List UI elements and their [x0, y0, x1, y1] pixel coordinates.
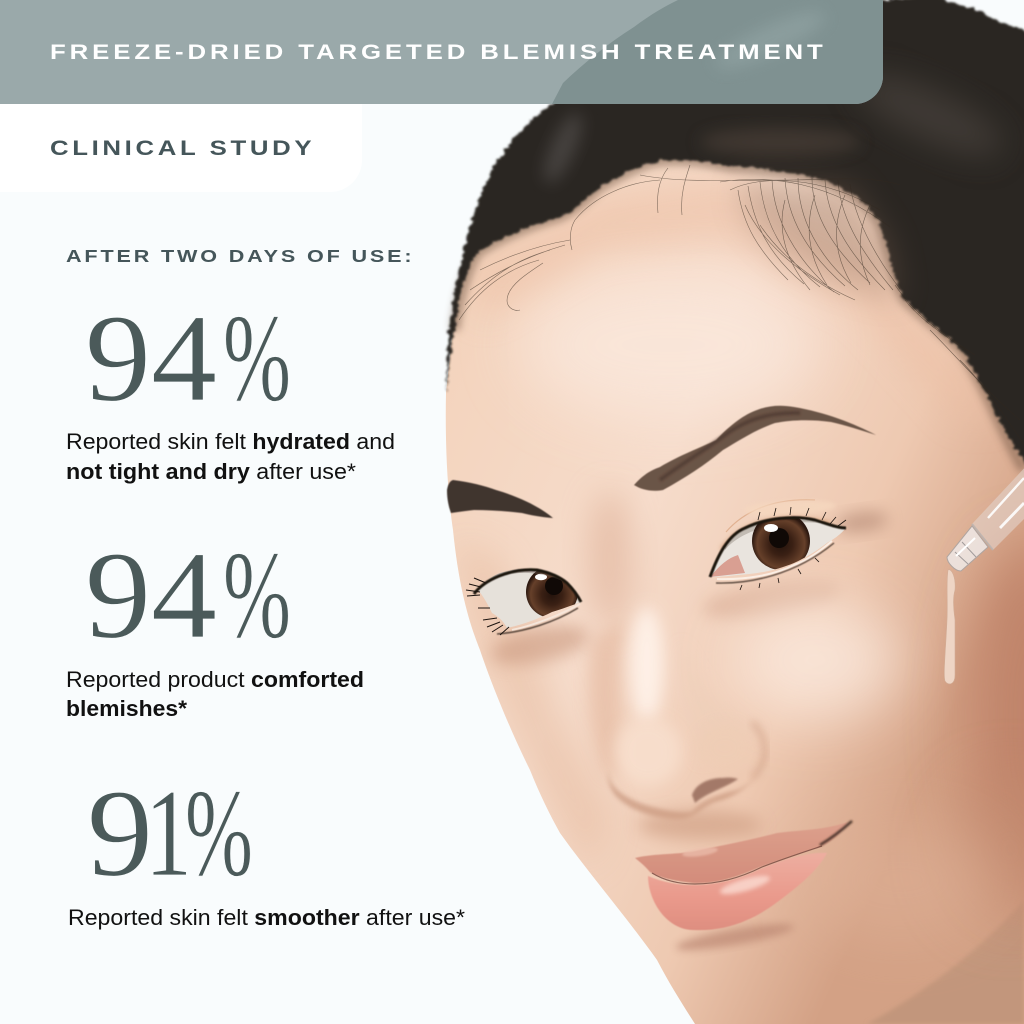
stat: 91% smoother: Reported skin felt smoother after use*	[68, 905, 465, 930]
nose right side tone	[680, 640, 760, 760]
stat: 94% hydrated: 94	[85, 290, 217, 428]
wispy baby hair zone	[740, 180, 900, 300]
warm hairline tone	[480, 175, 908, 336]
under-eye shade	[488, 618, 592, 672]
inner eye socket shade	[588, 490, 632, 630]
stat: 94% comforted: Reported product comforted	[66, 667, 364, 692]
face skin	[440, 120, 1024, 1024]
stat: 91% smoother	[68, 764, 465, 930]
cheek highlight	[730, 600, 900, 720]
right eyebrow	[634, 406, 876, 491]
nose wing contour	[752, 722, 765, 778]
jaw cheek warm tone	[865, 840, 988, 912]
nose tip	[614, 718, 682, 786]
left face edge shade	[460, 550, 606, 849]
stat: 94% hydrated: not tight and dry after use*	[66, 459, 356, 484]
nose underside	[607, 777, 747, 820]
stat: 91% smoother: %	[185, 765, 253, 903]
stat: 94% hydrated: Reported skin felt hydrated and	[66, 429, 395, 454]
stat: 91% smoother: 9	[87, 765, 153, 903]
left eye	[466, 565, 581, 635]
subheading: AFTER TWO DAYS OF USE:	[66, 247, 412, 267]
heading: product name: FREEZE-DRIED TARGETED BLEMISH TREATMENT	[50, 41, 823, 64]
lip shadow under	[675, 922, 793, 954]
stat: 94% comforted: blemishes*	[66, 696, 187, 721]
stat: 91% smoother: 1	[145, 764, 192, 902]
baby hairs	[459, 165, 1024, 445]
icon: glass dropper	[947, 462, 1024, 571]
header bar	[0, 0, 883, 104]
stat: 94% hydrated	[66, 290, 395, 484]
stat: 94% comforted	[66, 527, 364, 721]
lashes	[466, 578, 509, 635]
tab: clinical study: CLINICAL STUDY	[50, 137, 312, 160]
right eye	[710, 499, 846, 590]
stat: 94% hydrated: %	[223, 290, 291, 428]
stat: 94% comforted: 94	[85, 527, 217, 665]
mouth corner	[820, 821, 852, 845]
neck below jaw	[872, 908, 1024, 1024]
eyelid crease	[726, 500, 815, 532]
serum drip	[944, 570, 955, 684]
lashes	[740, 507, 846, 590]
hair sheen	[537, 108, 589, 188]
right cheek shade	[968, 540, 1024, 900]
outer eye shadow	[835, 508, 889, 536]
lid liner glow	[722, 519, 830, 550]
stat: 94% comforted: %	[223, 527, 291, 665]
left eyebrow	[447, 480, 553, 518]
nose side shade	[589, 620, 625, 775]
icon: nostril	[692, 778, 738, 803]
photo: woman's face with dropper	[440, 0, 1024, 1024]
lips	[635, 821, 852, 930]
tab: clinical study	[0, 104, 362, 192]
forehead glow	[520, 270, 820, 420]
hair	[446, 0, 1024, 470]
nose bridge highlight	[630, 607, 664, 723]
soft hairline shadow	[455, 160, 1024, 470]
